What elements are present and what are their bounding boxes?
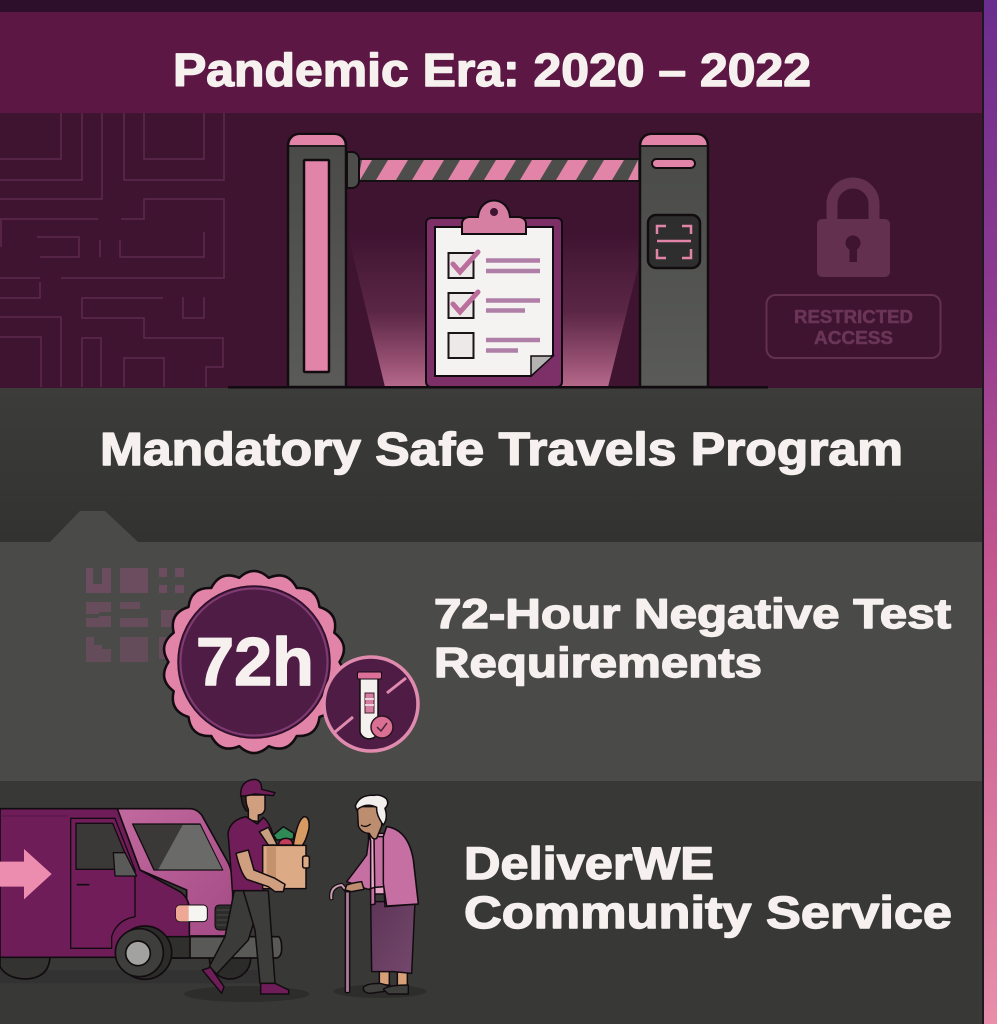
woman face [357,807,382,839]
check seal [371,716,393,738]
title: Pandemic Era: 2020 – 2022 [173,44,811,96]
barrier arm [358,158,640,182]
test requirement text: Requirements [434,639,762,686]
woman smile [361,824,371,826]
front wheel [115,926,172,979]
faded roof shape [50,511,138,542]
badge scalloped edge [164,571,344,753]
elderly woman [331,795,418,994]
person arm [236,850,285,892]
badge value: 72h [196,624,314,700]
van arrow [0,849,52,899]
community service text [464,838,952,938]
person shoes [202,967,224,993]
ground shadows [0,970,427,1002]
heading: mandatory program: Mandatory Safe Travels Program [100,423,903,475]
paper fold [531,356,553,376]
checklist row 3 [448,333,540,358]
test requirement text [434,590,951,686]
delivery illustration [0,779,427,1002]
badge: 72h [164,571,344,753]
van door [71,818,135,948]
panel: hero restricted area [0,113,982,388]
groceries [293,817,309,846]
barrier gate [288,134,708,387]
van front panel [117,809,233,936]
shopping bag [259,817,309,889]
right post [640,134,708,387]
woman hair [355,795,388,825]
test tube [358,672,382,739]
restricted access tag [766,295,940,358]
checklist row 2 [448,292,540,318]
van side panel [0,809,189,957]
top strip [0,0,997,12]
van bumper [163,937,282,958]
person back leg [209,891,263,974]
van rear wheel [0,955,50,979]
van roof line [0,815,68,817]
cane [331,885,350,993]
door window [76,823,132,869]
arm hinge [347,152,359,188]
faded building blocks [86,568,184,662]
door handle [77,882,89,887]
spotlight beam [350,235,638,387]
side mirror [113,853,137,876]
clip [462,200,526,234]
headlight [176,905,207,922]
checklist row 1 [448,252,540,278]
panel: title band [0,12,982,113]
person cap [241,779,275,796]
checklist paper [435,227,553,376]
delivery person [202,779,309,994]
windshield [133,824,223,870]
woman legs and shoes [379,970,407,987]
scanner [648,215,700,268]
delivery van [0,809,282,979]
person hair [241,793,253,813]
panel: test requirement band [0,542,982,781]
icon: test tube no-entry [324,657,418,751]
right accent strip [984,0,997,1024]
person neck and face [246,795,265,822]
panel: community service band [0,781,982,1024]
left post [288,134,346,387]
woman cardigan [347,827,418,907]
badge centre disc [178,586,330,738]
community service text: DeliverWE [464,838,714,889]
community service text: Community Service [464,887,952,938]
restricted access tag: ACCESS [814,328,893,348]
test requirement text: 72-Hour Negative Test [434,590,951,637]
icon: padlock [817,183,890,277]
grille [215,905,233,930]
clipboard checklist [426,200,562,387]
maze pattern [0,113,224,387]
clipboard board [426,218,562,387]
person front leg [243,891,275,983]
restricted access tag: RESTRICTED [794,307,913,327]
person shirt [228,817,275,891]
woman inner top [368,833,387,894]
van far wheel [209,938,251,979]
woman hands [345,882,364,892]
ground line [228,386,768,388]
panel: mandatory program heading band [0,388,982,542]
woman trousers [371,902,415,973]
